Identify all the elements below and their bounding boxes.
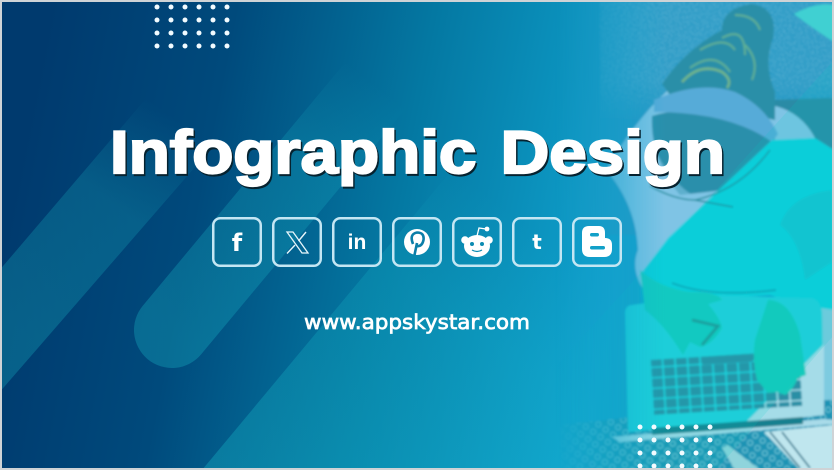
photo: keyboard [650, 351, 803, 415]
website url: www.appskystar.com [304, 310, 530, 334]
photo: left lower background [627, 236, 640, 286]
photo: face shadow under title [658, 156, 690, 196]
title: Infographic Design [110, 119, 725, 186]
photo: glasses cord [650, 150, 770, 207]
photo: patterned leg [572, 398, 832, 468]
photo: right fabric [820, 306, 832, 402]
dot grid: bottom [638, 424, 712, 468]
diagonal teal highlight over photo [618, 63, 832, 468]
photo: woman with laptop [574, 2, 832, 468]
photo: jumper hem [672, 283, 776, 293]
title: Infographic Design [112, 121, 726, 188]
icon: pinterest [393, 218, 441, 266]
icon: reddit [453, 218, 501, 266]
diagonal band: rounded centre [134, 93, 366, 368]
photo: hair below headband [652, 111, 775, 195]
icon: X [273, 218, 321, 266]
photo: headband [654, 88, 778, 142]
photo: sleeve right [782, 192, 831, 277]
dot grid: top [154, 4, 230, 48]
diagonal band: lower right [204, 222, 528, 468]
icon: tumblr [513, 218, 561, 266]
photo: laptop [612, 295, 834, 442]
photo: pale hoodie [606, 90, 815, 300]
icon: facebook [213, 218, 261, 266]
icon: blogger [573, 218, 621, 266]
photo: hair bun [662, 4, 775, 120]
icon: linkedin: in [348, 231, 366, 254]
photo: left hand [640, 270, 722, 355]
social icons row [213, 218, 621, 266]
photo: wall [598, 2, 832, 235]
icon: linkedin [333, 218, 381, 266]
photo: finger shadow [692, 320, 718, 345]
icon: tumblr: t [532, 230, 542, 254]
photo: lower right cloth [764, 425, 834, 470]
photo: right hand [754, 300, 806, 395]
photo: shoulder corner [794, 4, 834, 42]
photo: dark sofa shade [774, 98, 832, 149]
diagonal band: left [2, 122, 190, 389]
icon: facebook: f [232, 229, 243, 257]
photo: stand and thigh [722, 445, 760, 470]
photo: teal sweatshirt [640, 138, 834, 310]
